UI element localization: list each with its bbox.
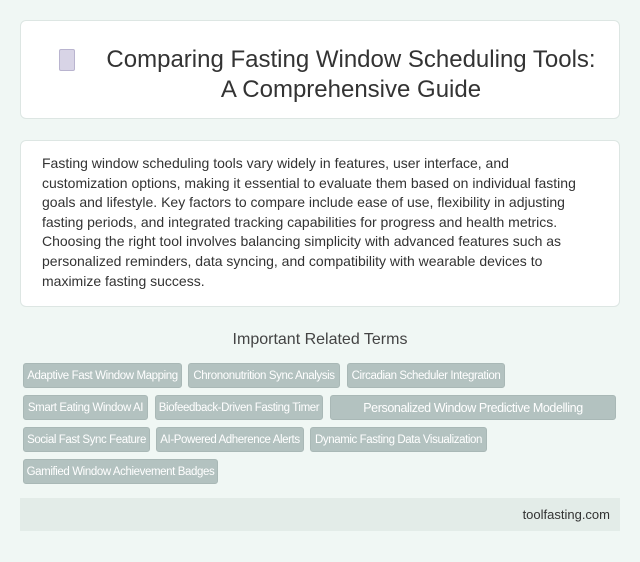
summary card — [20, 140, 620, 307]
related terms heading: Important Related Terms — [233, 331, 407, 348]
tags: Circadian Scheduler Integration — [352, 370, 500, 382]
tags: Personalized Window Predictive Modelling — [363, 401, 583, 415]
title: A Comprehensive Guide — [221, 76, 481, 103]
tags: Social Fast Sync Feature — [27, 434, 146, 446]
icon: scroll — [59, 49, 75, 71]
title — [106, 46, 596, 103]
header card — [20, 20, 620, 119]
tags: Chrononutrition Sync Analysis — [193, 370, 335, 382]
tags: Adaptive Fast Window Mapping — [27, 370, 178, 382]
title: Comparing Fasting Window Scheduling Tools: — [106, 46, 596, 73]
footer text: toolfasting.com — [523, 507, 610, 522]
tags: Smart Eating Window AI — [28, 402, 143, 414]
tags: Biofeedback-Driven Fasting Timer — [159, 402, 319, 414]
summary text: Fasting window scheduling tools vary widely in features, user interface, and customization options, making it essential to evaluate them based on individual fasting goals and lifestyle. Key factors to compare include ease of use, flexibility in adjusting fasting periods, and integrated tracking capabilities for progress and health metrics. Choosing the right tool involves balancing simplicity with advanced features such as personalized reminders, data syncing, and compatibility with wearable devices to maximize fasting success. — [42, 155, 576, 289]
footer — [20, 498, 620, 531]
tags: AI-Powered Adherence Alerts — [160, 434, 300, 446]
tags: Dynamic Fasting Data Visualization — [315, 434, 482, 446]
tags: Gamified Window Achievement Badges — [27, 466, 214, 478]
